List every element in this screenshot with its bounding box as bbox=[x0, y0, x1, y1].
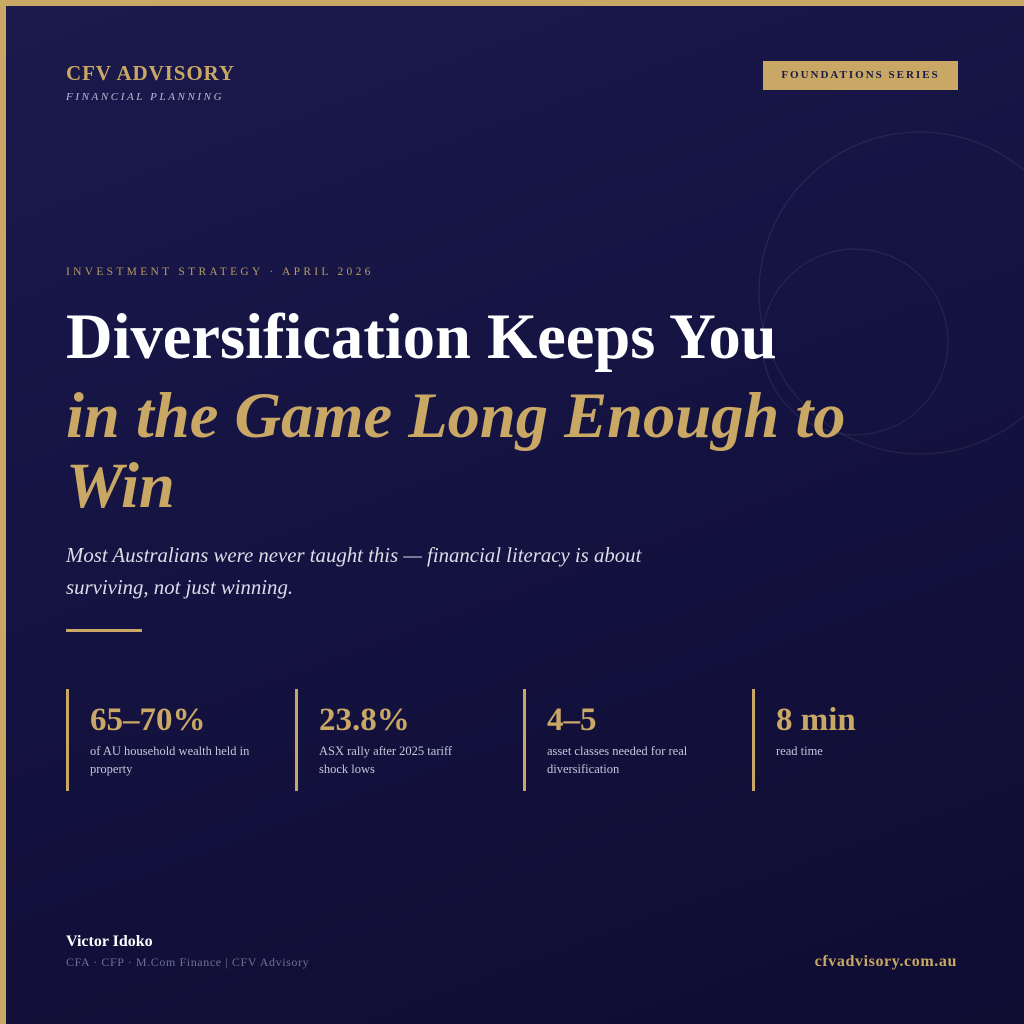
brand logo: CFV ADVISORY bbox=[66, 61, 235, 85]
stat 3: asset classes needed for real diversification bbox=[547, 744, 687, 776]
border: left gold bbox=[0, 0, 6, 1024]
stat 3: 4–5 bbox=[547, 702, 596, 738]
stat 4: 8 min bbox=[776, 702, 856, 738]
stat 3 bbox=[523, 689, 723, 791]
stat 2 bbox=[295, 689, 495, 791]
stat 4 bbox=[752, 689, 952, 791]
badge: foundations series bbox=[763, 61, 958, 90]
author: CFA · CFP · M.Com Finance | CFV Advisory bbox=[66, 955, 309, 969]
author bbox=[66, 933, 309, 969]
badge: foundations series: FOUNDATIONS SERIES bbox=[781, 69, 940, 81]
brand logo: FINANCIAL PLANNING bbox=[66, 91, 224, 103]
stat 2: ASX rally after 2025 tariff shock lows bbox=[319, 744, 452, 776]
stat 2: 23.8% bbox=[319, 702, 410, 738]
website: cfvadvisory.com.au bbox=[815, 953, 957, 970]
author: Victor Idoko bbox=[66, 933, 153, 950]
stat 4: read time bbox=[776, 744, 823, 758]
title: in the Game Long Enough to Win bbox=[66, 380, 846, 521]
title bbox=[66, 301, 846, 521]
stat 1: 65–70% bbox=[90, 702, 206, 738]
stats row bbox=[66, 689, 856, 791]
title: Diversification Keeps You bbox=[66, 301, 777, 372]
brand logo bbox=[66, 61, 235, 103]
subtitle: Most Australians were never taught this — financial literacy is about surviving, not just winning. bbox=[66, 544, 641, 599]
eyebrow: INVESTMENT STRATEGY · APRIL 2026 bbox=[66, 266, 374, 278]
divider accent bbox=[66, 629, 142, 632]
stat 1: of AU household wealth held in property bbox=[90, 744, 249, 776]
border: top gold bbox=[0, 0, 1024, 6]
stat 1 bbox=[66, 689, 266, 791]
